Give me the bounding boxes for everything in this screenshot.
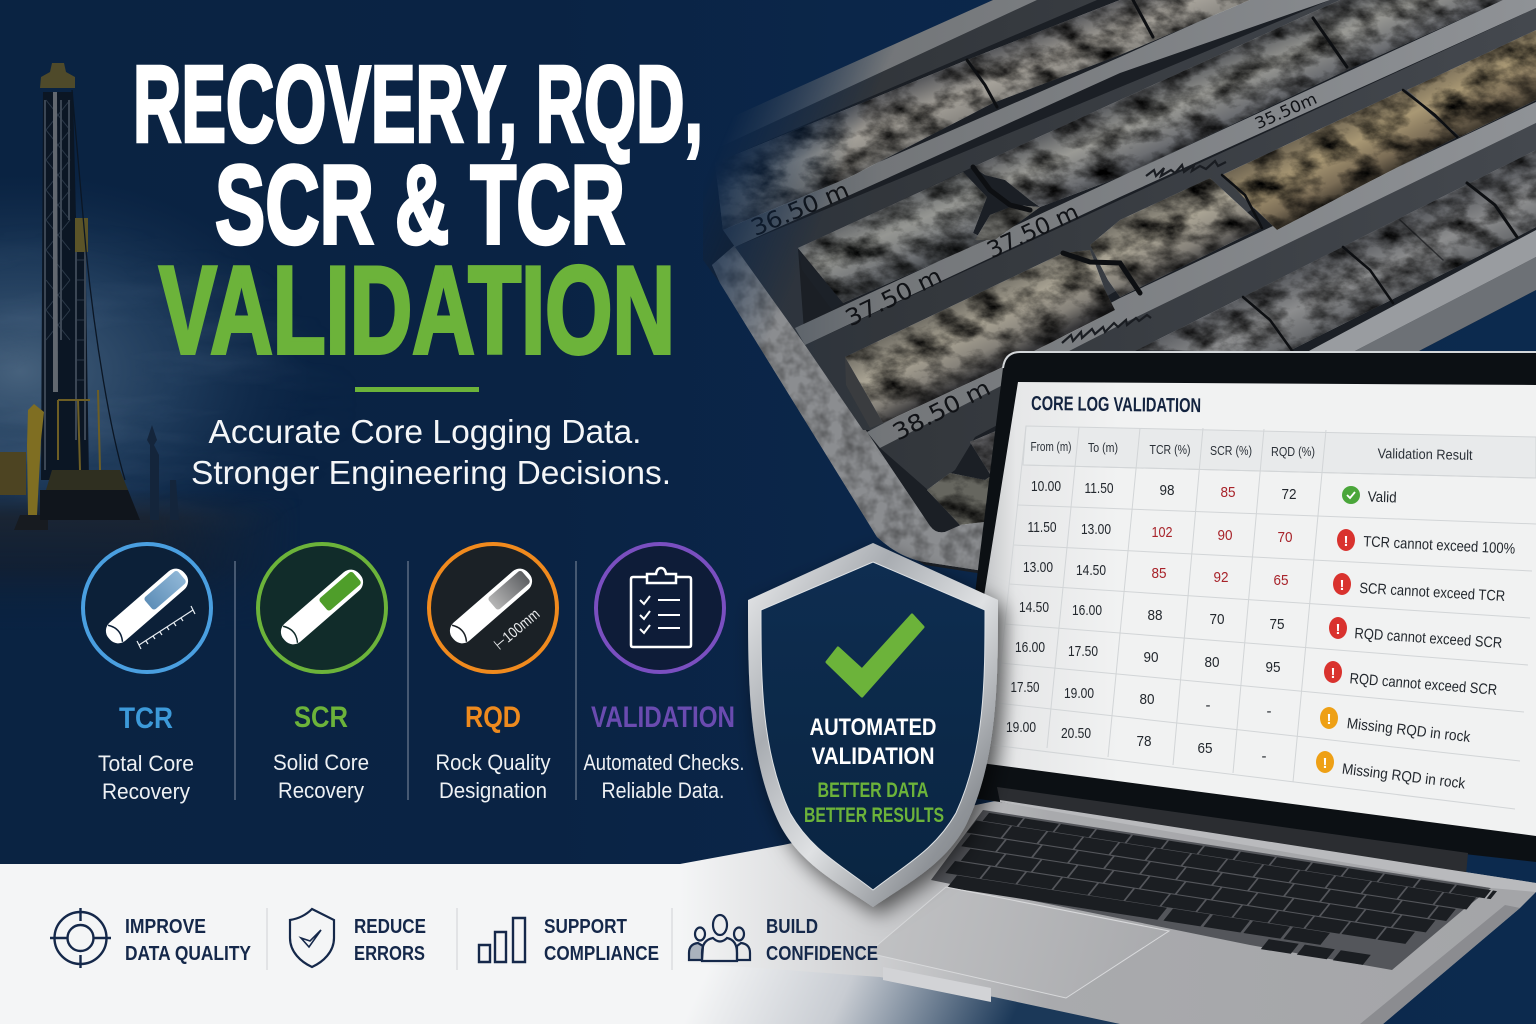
table row 3: SCR cannot exceed TCR [1359,580,1506,605]
depth labels on tray: 36.50 m [747,177,853,242]
panel: TCR [83,544,211,804]
shield text: BETTER DATA [818,779,928,802]
table row 3: 65 [1274,572,1288,589]
table row 4: 16.00 [1072,602,1102,619]
laptop keyboard [920,810,1494,970]
tray rails [703,0,1536,490]
smudged tray markings [1062,161,1226,343]
table row 5: 90 [1144,649,1158,666]
TCR description: Recovery [102,779,190,804]
TCR description: Total Core [98,751,194,776]
table row 2: 90 [1218,527,1232,544]
TCR label: TCR [119,702,173,735]
depth labels on tray: 35.50m [1252,89,1320,133]
core tray photo [703,0,1536,575]
table header row: TCR (%) [1150,442,1190,457]
RQD description [436,750,550,803]
depth labels on tray: 38.50 m [889,375,995,446]
table row 3: 14.50 [1076,562,1106,579]
table row 2: ! [1344,533,1348,550]
icon: TCR core with ruler [83,544,211,672]
validation description: Reliable Data. [602,778,724,803]
title [133,44,703,380]
table header row: SCR (%) [1210,443,1252,458]
table row 5 [1015,639,1498,699]
table row 6: 17.50 [1010,679,1040,696]
table row 5: 95 [1266,659,1280,676]
icon: RQD core with 100mm marker: ⊢100mm [491,606,543,653]
text: CONFIDENCE [766,942,878,965]
subtitle: Stronger Engineering Decisions. [191,454,671,491]
laptop screen [958,382,1536,836]
RQD label: RQD [465,701,521,734]
drill core rock segments [715,0,1536,525]
subtitle [191,413,671,491]
benefit: support compliance [479,915,659,965]
SCR label: SCR [294,701,348,734]
table row 7: 19.00 [1006,719,1036,736]
tray frame [712,245,1004,572]
table row 7 [1006,719,1467,793]
table row 3: ! [1340,577,1344,594]
SCR description: Solid Core [273,750,369,775]
table row 7: Missing RQD in rock [1341,761,1467,793]
text [544,915,659,965]
text: DATA QUALITY [125,942,251,965]
drilling rig silhouette [0,63,179,530]
icon: target [50,908,111,968]
table row 4: 75 [1270,616,1284,633]
icon: RQD core with 100mm marker [429,544,557,672]
table grid [992,426,1536,809]
table row 2: 102 [1152,524,1172,541]
text: SUPPORT [544,915,627,938]
table row 3 [1023,559,1506,605]
table header row [1030,439,1473,463]
table row 6: 19.00 [1064,685,1094,702]
text: BUILD [766,915,818,938]
table row 6 [1010,679,1472,746]
validation description [584,750,744,803]
core log validation table [992,393,1536,809]
table row 1: 85 [1220,484,1236,501]
icon: people [689,915,750,961]
tray dark interior [703,0,1536,575]
subtitle: Accurate Core Logging Data. [208,413,642,450]
core end faces and cracks [967,0,1517,352]
SCR description: Recovery [278,778,364,803]
RQD description: Designation [439,778,547,803]
table row 1 [1031,478,1397,507]
table header row: RQD (%) [1271,444,1315,459]
table row 5: RQD cannot exceed SCR [1349,670,1498,699]
table row 4: RQD cannot exceed SCR [1354,625,1503,652]
benefit: build confidence [689,915,878,965]
text [125,915,251,965]
TCR description [98,751,194,804]
table row 4 [1019,599,1503,652]
depth labels on tray: 37.50 m [983,199,1083,264]
title accent rule [355,387,479,392]
table row 2: 70 [1278,529,1292,546]
shield text: VALIDATION [812,743,934,770]
panel: SCR [258,544,386,803]
laptop hinge [997,787,1468,875]
sky and ground behind the drilling rig [0,216,277,586]
table row 2: TCR cannot exceed 100% [1363,533,1516,558]
table row 7: 20.50 [1061,725,1091,742]
bottom benefits band background [0,864,1120,1024]
benefit: reduce errors [290,909,426,967]
table row 7: 65 [1198,740,1212,757]
text: IMPROVE [125,915,206,938]
text [766,915,878,965]
table row 6: - [1206,697,1210,714]
table row 6: ! [1326,711,1332,728]
validation description: Automated Checks. [584,750,744,775]
text: REDUCE [354,915,426,938]
table row 5: 16.00 [1015,639,1045,656]
table row 2: 13.00 [1081,521,1111,538]
depth labels on tray: 37.50 m [841,263,946,332]
table header row: To (m) [1088,440,1118,455]
text: COMPLIANCE [544,942,659,965]
table row 1: 98 [1160,482,1174,499]
table row 4: 70 [1210,611,1224,628]
table row 5: 80 [1204,654,1220,671]
laptop trackpad [868,887,1169,998]
table row 6: Missing RQD in rock [1346,715,1472,746]
RQD description: Rock Quality [436,750,550,775]
benefit: improve data quality [50,908,251,968]
table row 6: - [1266,703,1272,720]
table row 4: 88 [1148,607,1162,624]
table row 5: 17.50 [1068,643,1098,660]
laptop [650,352,1536,1024]
table header row: Validation Result [1377,445,1473,463]
SCR description [273,750,369,803]
table row 4: 14.50 [1019,599,1049,616]
title: RECOVERY, RQD, [133,44,703,166]
table row 3: 92 [1214,569,1228,586]
table row 1: 72 [1282,486,1296,503]
table row 6: 80 [1140,691,1154,708]
table row 3: 13.00 [1023,559,1053,576]
table row 2: 11.50 [1028,519,1056,536]
title: SCR & TCR [215,142,625,268]
icon: shield check [290,909,334,967]
icon: bar chart [479,918,525,962]
table row 2 [1028,519,1516,558]
automated validation shield badge [748,543,998,907]
laptop deck [650,800,1536,1024]
shield text: BETTER RESULTS [804,804,944,827]
shield text [804,714,944,827]
table row 3: 85 [1152,565,1166,582]
table row 7: ! [1322,755,1328,772]
validation label: VALIDATION [591,701,735,734]
table row 1: Valid [1367,489,1397,507]
shield text: AUTOMATED [810,714,936,741]
panel: validation [584,544,744,803]
icon: clipboard checklist [596,544,724,672]
table header row: From (m) [1030,439,1072,454]
icon: green check mark [827,615,923,696]
table row 5: ! [1330,665,1336,682]
table row 1: 11.50 [1084,480,1114,497]
text: ERRORS [354,942,425,965]
title: VALIDATION [159,242,675,380]
table heading: CORE LOG VALIDATION [1031,393,1201,417]
table row 4: ! [1336,621,1340,638]
panel: RQD [429,544,557,803]
text [354,915,426,965]
table row 1: 10.00 [1031,478,1061,495]
table row 7: 78 [1136,733,1152,750]
icon: SCR core with green window [258,544,386,672]
table row 7: - [1262,748,1266,765]
depth labels on tray [747,89,1320,446]
laptop screen bezel [950,352,1536,862]
